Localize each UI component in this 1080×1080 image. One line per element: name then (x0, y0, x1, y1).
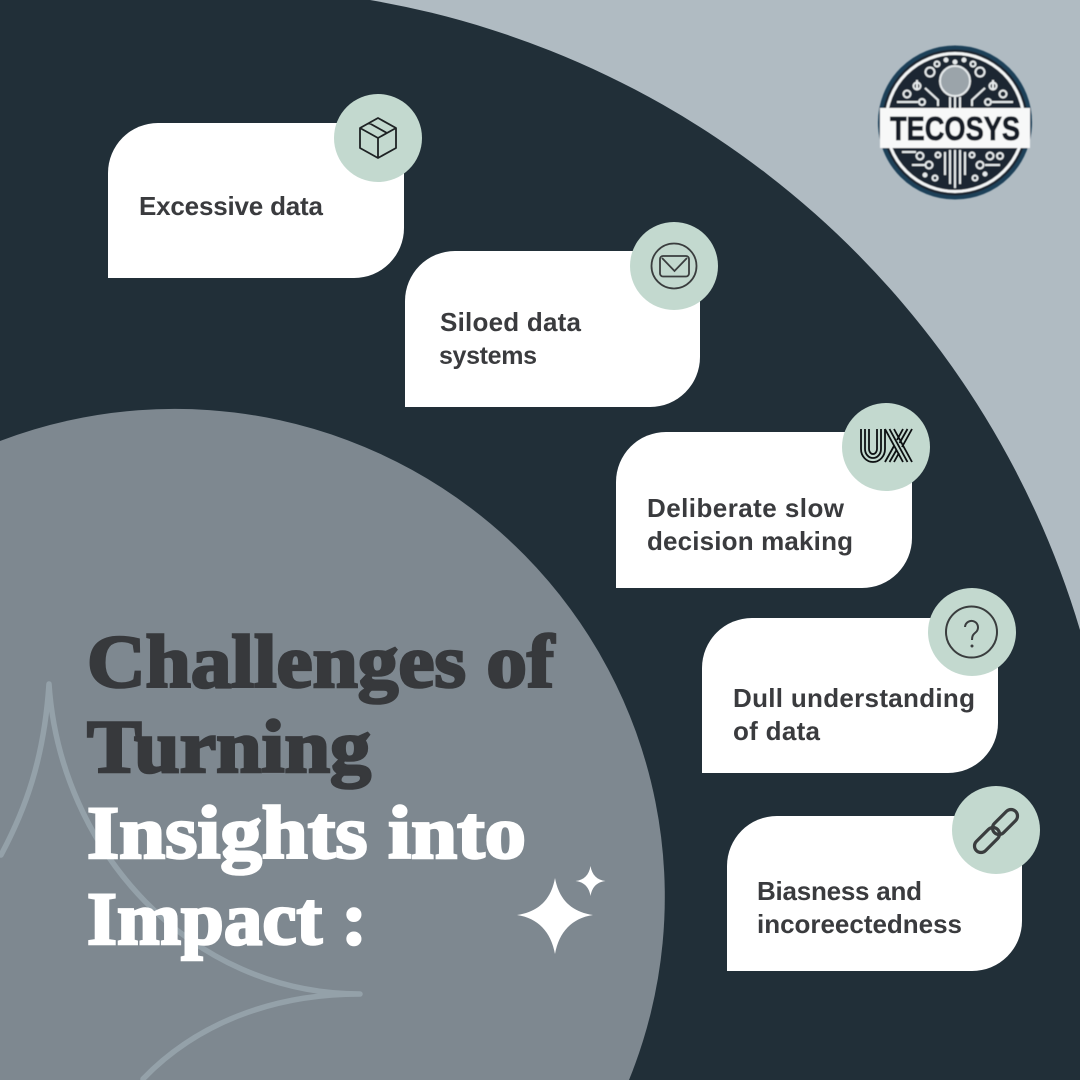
card: Biasness and incoreectedness (727, 786, 1040, 971)
card: Excessive data (108, 94, 422, 278)
icon badge: box (334, 94, 422, 182)
grey circle panel (0, 409, 665, 1080)
card text (757, 876, 962, 939)
card text: Dull understanding (733, 683, 975, 713)
title: white lines: Insights into (87, 792, 526, 875)
card text: Excessive data (139, 191, 324, 221)
card text (439, 307, 582, 370)
icon badge: mail (630, 222, 718, 310)
card text: Deliberate slow (647, 493, 845, 523)
card text (733, 683, 975, 746)
card: Dull understanding of data (702, 588, 1016, 773)
title: dark lines: Turning (87, 706, 371, 789)
card text (647, 493, 853, 556)
card text: of data (733, 716, 821, 746)
card: Deliberate slow decision making (616, 403, 930, 588)
title: white lines (87, 792, 526, 961)
card body (108, 123, 404, 278)
icon badge: question (928, 588, 1016, 676)
card text: incoreectedness (757, 909, 962, 939)
card body (616, 432, 912, 588)
card body (702, 618, 998, 773)
logo: TECOSYS (880, 48, 1030, 198)
icon badge: UX (842, 403, 930, 491)
card: Siloed data systems (405, 222, 718, 407)
card body (405, 251, 700, 407)
decorative star outline (1, 684, 360, 1079)
logo: TECOSYS: TECOSYS (890, 110, 1020, 147)
title: dark lines: Challenges of (87, 621, 555, 704)
card text: decision making (647, 526, 853, 556)
card body (727, 816, 1022, 971)
card text: systems (439, 342, 537, 370)
icon: sparkles (517, 866, 606, 954)
title: dark lines (87, 621, 555, 789)
card text: Siloed data (440, 307, 582, 337)
icon badge: link (952, 786, 1040, 874)
title: white lines: Impact : (87, 878, 367, 961)
title (87, 621, 555, 961)
card text: Biasness and (757, 876, 922, 906)
